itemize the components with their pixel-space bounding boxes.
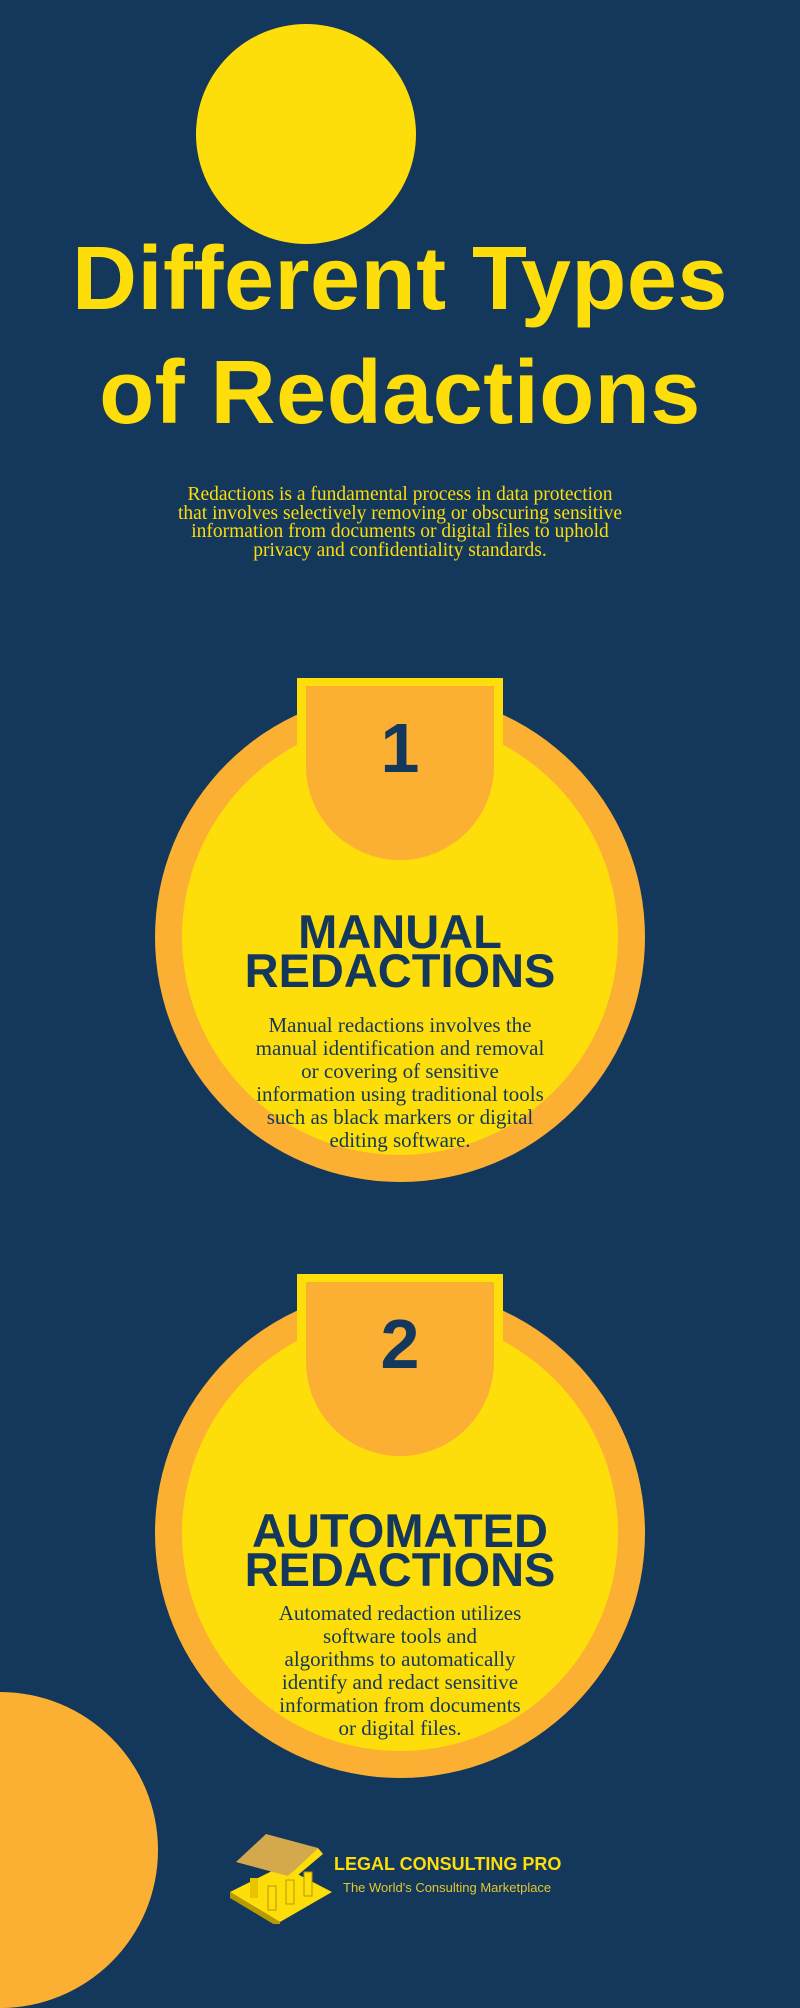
body text: or covering of sensitive [301, 1059, 499, 1083]
body text: information using traditional tools [256, 1082, 544, 1106]
body text: such as black markers or digital [267, 1105, 533, 1129]
bottom-left orange circle [0, 1692, 158, 2008]
icon: courthouse [230, 1834, 332, 1924]
logo [230, 1834, 561, 1924]
panel: automated redactions [155, 1274, 645, 1778]
intro text: Redactions is a fundamental process in data protection [187, 484, 613, 505]
title: of Redactions [99, 343, 701, 443]
heading: AUTOMATED [252, 1504, 548, 1557]
title: Different Types [72, 229, 728, 329]
inner circle [182, 719, 618, 1155]
number 1: 1 [381, 709, 419, 787]
number tab [297, 678, 503, 868]
body text: Automated redaction utilizes [279, 1601, 521, 1625]
body text: identify and redact sensitive [282, 1670, 518, 1694]
body text: manual identification and removal [256, 1036, 544, 1060]
body text [278, 1601, 521, 1740]
intro text: privacy and confidentiality standards. [253, 540, 547, 560]
inner circle [182, 1315, 618, 1751]
body text: editing software. [329, 1128, 471, 1152]
intro text [178, 484, 622, 560]
body text: information from documents [279, 1693, 521, 1717]
body text [256, 1013, 544, 1152]
tagline: The World's Consulting Marketplace [343, 1880, 551, 1895]
heading: MANUAL [298, 905, 502, 958]
heading [245, 1504, 555, 1596]
outer circle [155, 1288, 645, 1778]
number 2: 2 [381, 1305, 419, 1383]
outer circle [155, 692, 645, 1182]
body text: software tools and [323, 1624, 477, 1648]
intro text: information from documents or digital files to uphold [191, 521, 609, 542]
number tab [297, 1274, 503, 1464]
intro text: that involves selectively removing or obscuring sensitive [178, 502, 622, 524]
body text: Manual redactions involves the [268, 1013, 532, 1037]
panel: manual redactions [155, 678, 645, 1182]
body text: or digital files. [338, 1716, 462, 1740]
decorative top circle [196, 24, 416, 244]
heading: REDACTIONS [245, 944, 555, 997]
heading: REDACTIONS [245, 1543, 555, 1596]
title [72, 229, 728, 443]
heading [245, 905, 555, 997]
body text: algorithms to automatically [285, 1647, 515, 1671]
brand name: LEGAL CONSULTING PRO [334, 1854, 561, 1874]
